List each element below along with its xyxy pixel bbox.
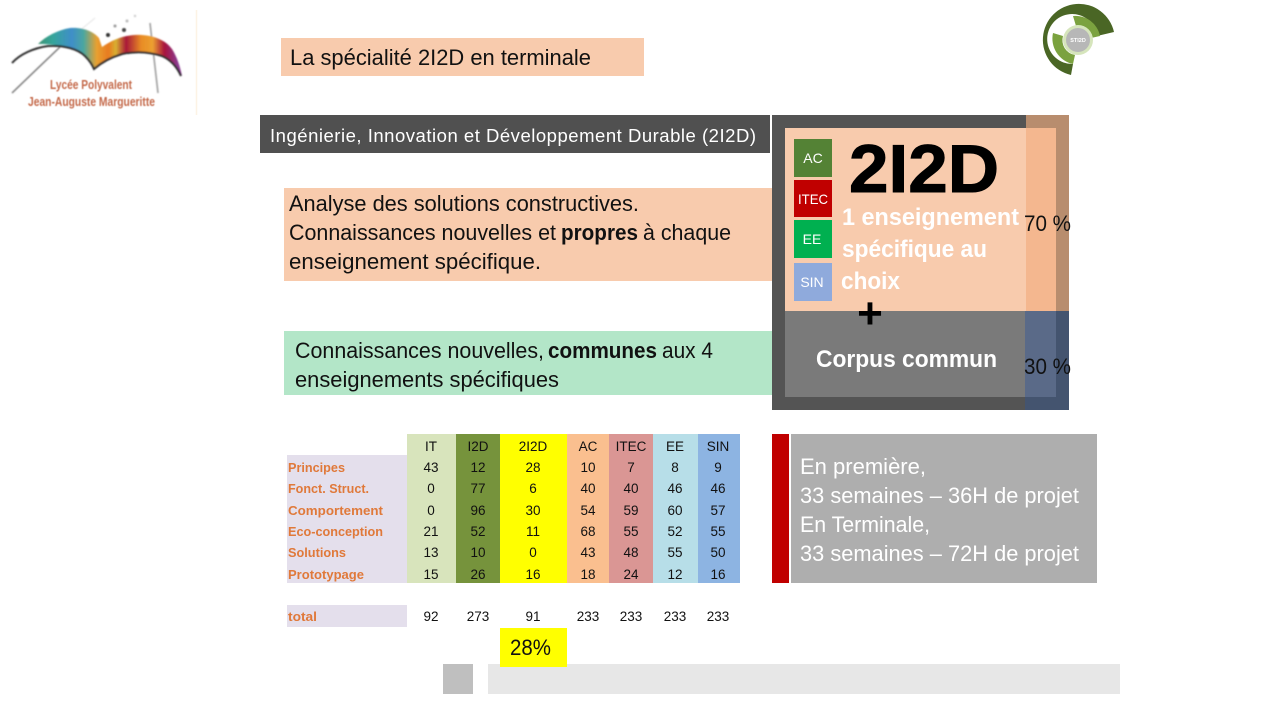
table values: 52 — [470, 524, 486, 539]
table: hours by subject — [287, 434, 740, 627]
row labels: Eco-conception — [288, 525, 383, 539]
text block: specific knowledge: Connaissances nouvelles et — [289, 220, 556, 245]
title: La spécialité 2I2D en terminale — [290, 45, 591, 70]
table values: 48 — [623, 545, 639, 560]
panel: project hours: 33 semaines – 72H de projet — [800, 541, 1079, 566]
text block: common knowledge — [284, 331, 773, 395]
table values: 233 — [664, 609, 686, 624]
table values: 16 — [710, 567, 726, 582]
row labels: Comportement — [288, 504, 384, 518]
school logo: Lycée Polyvalent Jean-Auguste Margueritte: Jean-Auguste Margueritte — [28, 95, 155, 109]
text block: specific knowledge: Analyse des solutions constructives. — [289, 191, 639, 216]
table values: 46 — [667, 481, 683, 496]
table values: 0 — [529, 545, 537, 560]
table values: 2I2D — [519, 439, 548, 454]
table values: 43 — [423, 460, 439, 475]
callout: 28 percent — [500, 628, 567, 667]
table values: SIN — [707, 439, 729, 454]
school logo: Lycée Polyvalent Jean-Auguste Margueritte: Lycée Polyvalent — [50, 78, 133, 92]
table values: 233 — [620, 609, 642, 624]
table values: 30 — [525, 503, 541, 518]
table values: 13 — [423, 545, 439, 560]
table values: 0 — [427, 481, 435, 496]
table values: IT — [425, 439, 437, 454]
option: AC: AC — [803, 150, 823, 166]
text block: common knowledge: communes — [548, 338, 657, 363]
table values: 7 — [627, 460, 635, 475]
30 percent: 30 % — [1024, 354, 1071, 379]
table values: 46 — [710, 481, 726, 496]
table values: 24 — [623, 567, 639, 582]
table values: 55 — [710, 524, 726, 539]
table values: 55 — [623, 524, 639, 539]
row labels: total — [288, 610, 317, 624]
footer bar — [488, 664, 1120, 694]
common core label: Corpus commun — [816, 346, 997, 373]
STI2D logo: STI2D — [1070, 38, 1086, 44]
table values: 6 — [529, 481, 537, 496]
panel: project hours — [772, 434, 1097, 583]
row labels: Fonct. Struct. — [288, 482, 369, 496]
text block: common knowledge: Connaissances nouvelles, — [295, 338, 544, 363]
text block: specific knowledge: à chaque — [643, 220, 731, 245]
school logo: Lycée Polyvalent Jean-Auguste Margueritte — [12, 10, 196, 115]
table values: 96 — [470, 503, 486, 518]
table values: 59 — [623, 503, 639, 518]
panel: 2I2D structure — [772, 115, 1071, 410]
table values: 54 — [580, 503, 596, 518]
title — [281, 38, 644, 76]
heading bar: Ingénierie, Innovation et Développement Durable (2I2D) — [270, 125, 756, 146]
panel: project hours: En première, — [800, 454, 926, 479]
row labels: Prototypage — [288, 568, 364, 582]
table values: 55 — [667, 545, 683, 560]
table values: 28 — [525, 460, 541, 475]
callout: 28 percent: 28% — [510, 635, 551, 660]
table values: ITEC — [616, 439, 647, 454]
STI2D logo — [1043, 4, 1114, 75]
option: EE — [794, 220, 832, 258]
table values: 10 — [580, 460, 596, 475]
table values: 15 — [423, 567, 439, 582]
table values: 68 — [580, 524, 596, 539]
table values: 10 — [470, 545, 486, 560]
table values: 12 — [667, 567, 683, 582]
table values: 18 — [580, 567, 596, 582]
heading bar — [260, 115, 770, 153]
table values: 60 — [667, 503, 683, 518]
table values: 43 — [580, 545, 596, 560]
specific teaching text: spécifique au — [842, 236, 987, 263]
option: SIN — [794, 263, 832, 301]
panel: project hours: En Terminale, — [800, 512, 930, 537]
table values: 91 — [525, 609, 541, 624]
option: ITEC — [794, 180, 832, 217]
table values: 273 — [467, 609, 489, 624]
table values: 57 — [710, 503, 726, 518]
table values: 16 — [525, 567, 541, 582]
table values: 50 — [710, 545, 726, 560]
table values: 11 — [526, 524, 540, 539]
table values: 40 — [623, 481, 639, 496]
specific teaching text — [841, 204, 1019, 295]
table values: I2D — [467, 439, 489, 454]
plus sign: + — [857, 289, 883, 338]
panel: project hours: 33 semaines – 36H de projet — [800, 483, 1079, 508]
table values: EE — [666, 439, 684, 454]
text block: common knowledge: enseignements spécifiques — [295, 367, 559, 392]
table values: 21 — [423, 524, 439, 539]
table values: 9 — [714, 460, 722, 475]
table values — [423, 439, 729, 624]
table values: AC — [579, 439, 598, 454]
table values: 92 — [423, 609, 439, 624]
footer square — [443, 664, 473, 694]
table values: 77 — [470, 481, 486, 496]
2I2D heading: 2I2D — [849, 131, 999, 207]
option: SIN: SIN — [800, 274, 824, 290]
text block: specific knowledge — [284, 188, 773, 281]
table values: 40 — [580, 481, 596, 496]
text block: common knowledge: aux 4 — [662, 338, 713, 363]
option: ITEC: ITEC — [798, 191, 828, 207]
specific teaching text: 1 enseignement — [842, 204, 1019, 231]
option: EE: EE — [803, 231, 821, 247]
table values: 233 — [707, 609, 729, 624]
row labels: Solutions — [288, 546, 346, 560]
table values: 8 — [671, 460, 679, 475]
table values: 0 — [427, 503, 435, 518]
table values: 52 — [667, 524, 683, 539]
table values: 12 — [470, 460, 486, 475]
option: AC — [794, 139, 832, 177]
specific teaching text: choix — [841, 268, 901, 295]
text block: specific knowledge: propres — [561, 220, 638, 245]
table values: 233 — [577, 609, 599, 624]
text block: specific knowledge: enseignement spécifique. — [289, 249, 541, 274]
table values: 26 — [470, 567, 486, 582]
row labels: Principes — [288, 461, 345, 475]
70 percent: 70 % — [1024, 211, 1071, 236]
row labels — [288, 461, 384, 624]
